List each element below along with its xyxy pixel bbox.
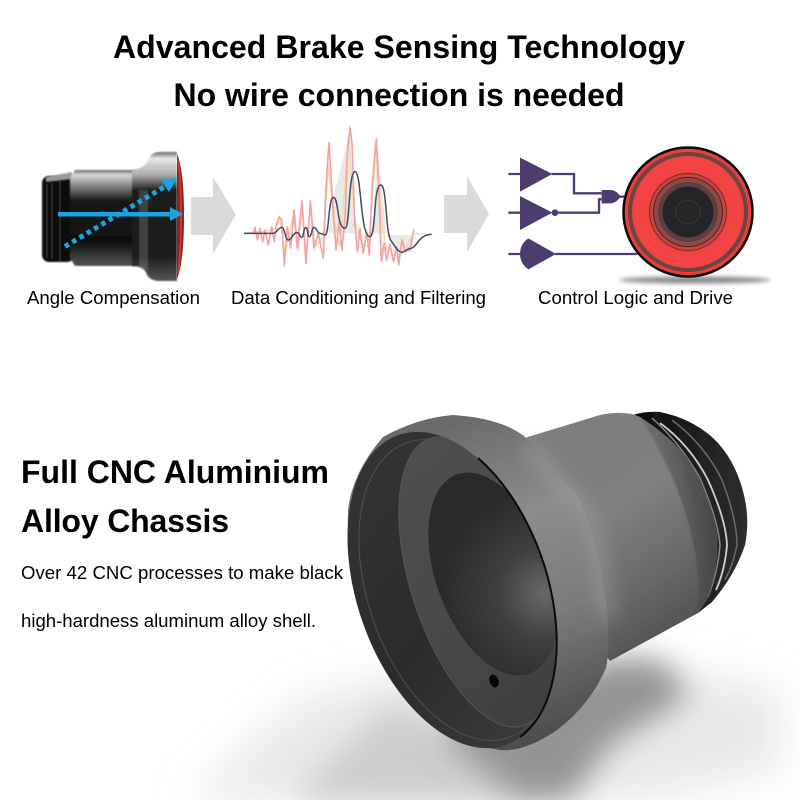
label: data conditioning: Data Conditioning and Filtering [231,287,486,308]
filtered signal dark [244,172,432,252]
black inner edge [478,458,557,737]
heading: chassis [21,454,329,539]
threaded end [633,412,747,613]
inner seat [398,436,556,728]
diagram: control logic gates [508,158,637,269]
flange highlight [525,445,606,620]
cylinder body [518,413,717,661]
text block: chassis description: Over 42 CNC processes to make black [21,562,344,583]
floor shadow [190,660,780,800]
raw signal yellow [244,140,427,257]
title [113,29,685,113]
text block: chassis description [21,562,344,631]
flange outer shell [348,415,608,750]
label: angle compensation: Angle Compensation [27,287,200,308]
title: Advanced Brake Sensing Technology [113,29,685,65]
light shadow [619,276,771,284]
raw signal red [253,127,414,266]
title: No wire connection is needed [174,77,624,113]
gate symbols [520,158,621,269]
arrow: direct axis [58,207,183,221]
label: control logic: Control Logic and Drive [538,287,733,308]
arrow: step two to step three [444,176,489,252]
chart: filtered signal [244,127,432,266]
inner cavity [428,472,556,676]
chart area fill [328,130,413,252]
wires [508,174,637,254]
inner seat and cavity [358,436,556,741]
cylinder end shading [640,417,717,613]
arrow: step one to step two [191,177,236,254]
arrow: dotted tilted axis [65,178,177,246]
wall groove [358,439,533,741]
text block: chassis description: high-hardness aluminum alloy shell. [21,610,316,631]
icon: illuminated tail light [619,148,771,284]
icon: screw hole [488,673,500,689]
heading: chassis: Alloy Chassis [21,503,229,539]
flange inner wall [309,404,595,776]
heading: chassis: Full CNC Aluminium [21,454,329,490]
product: CNC aluminium housing [348,412,748,750]
icon: angle compensation sensor [42,152,184,281]
